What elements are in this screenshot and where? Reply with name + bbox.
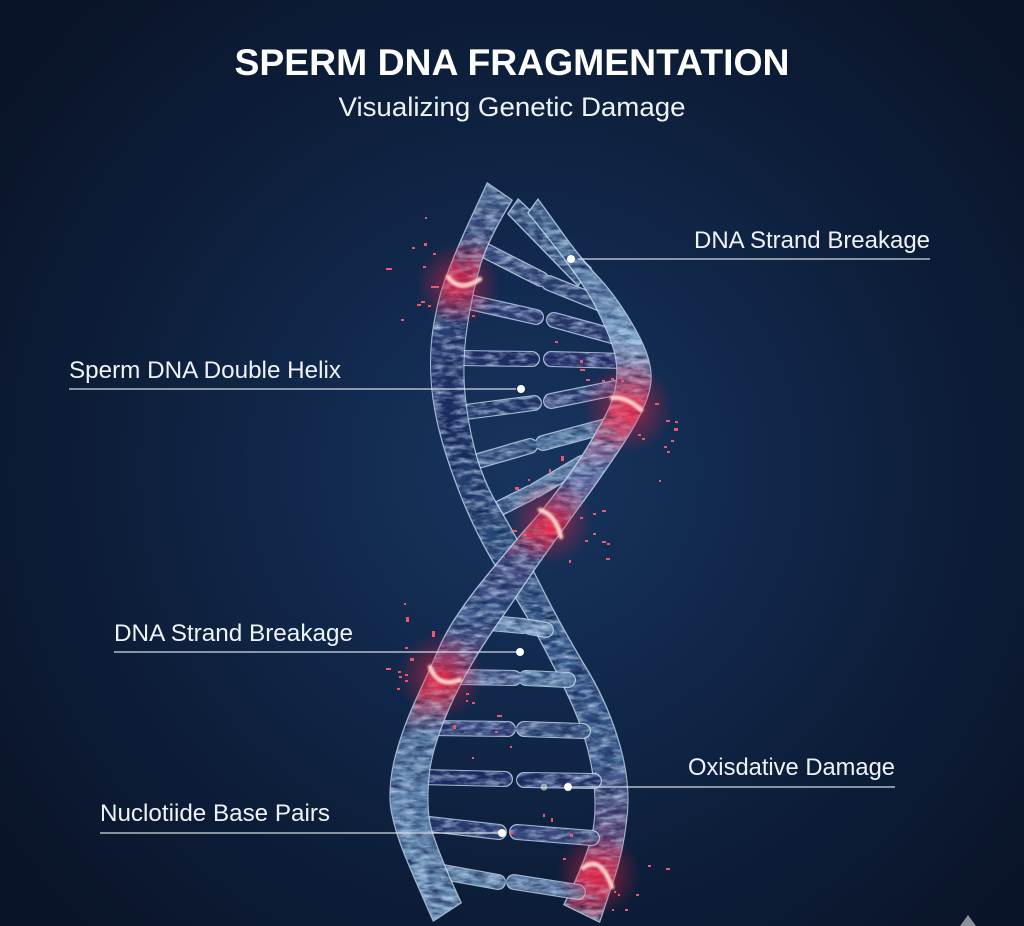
label: Sperm DNA Double Helix: [69, 357, 525, 393]
label: DNA Strand Breakage (left): DNA Strand Breakage: [114, 620, 353, 647]
upper base pair rungs: [458, 248, 625, 511]
dna double helix: [386, 182, 678, 923]
damage glows: [397, 243, 674, 916]
label: DNA Strand Breakage (left): [114, 620, 524, 656]
label: Oxisdative Damage: Oxisdative Damage: [688, 754, 895, 781]
damage particles: [386, 217, 678, 911]
label: DNA Strand Breakage (top right): DNA Strand Breakage: [694, 227, 930, 254]
bright fracture bands: [430, 277, 641, 887]
title: SPERM DNA FRAGMENTATION: [234, 42, 790, 83]
label: Nuclotiide Base Pairs: Nuclotiide Base Pairs: [100, 800, 330, 827]
label: DNA Strand Breakage (top right): [567, 227, 930, 263]
label: Sperm DNA Double Helix: Sperm DNA Double Helix: [69, 357, 341, 384]
strand two: [389, 198, 652, 922]
broken strand fragment: [507, 198, 592, 287]
label: Nuclotiide Base Pairs: [100, 800, 506, 837]
strand one: [430, 182, 629, 923]
lower base pair rungs: [420, 623, 594, 892]
label: Oxisdative Damage: [540, 754, 895, 791]
icon: corner triangle mark: [960, 915, 976, 926]
subtitle: Visualizing Genetic Damage: [338, 92, 686, 122]
